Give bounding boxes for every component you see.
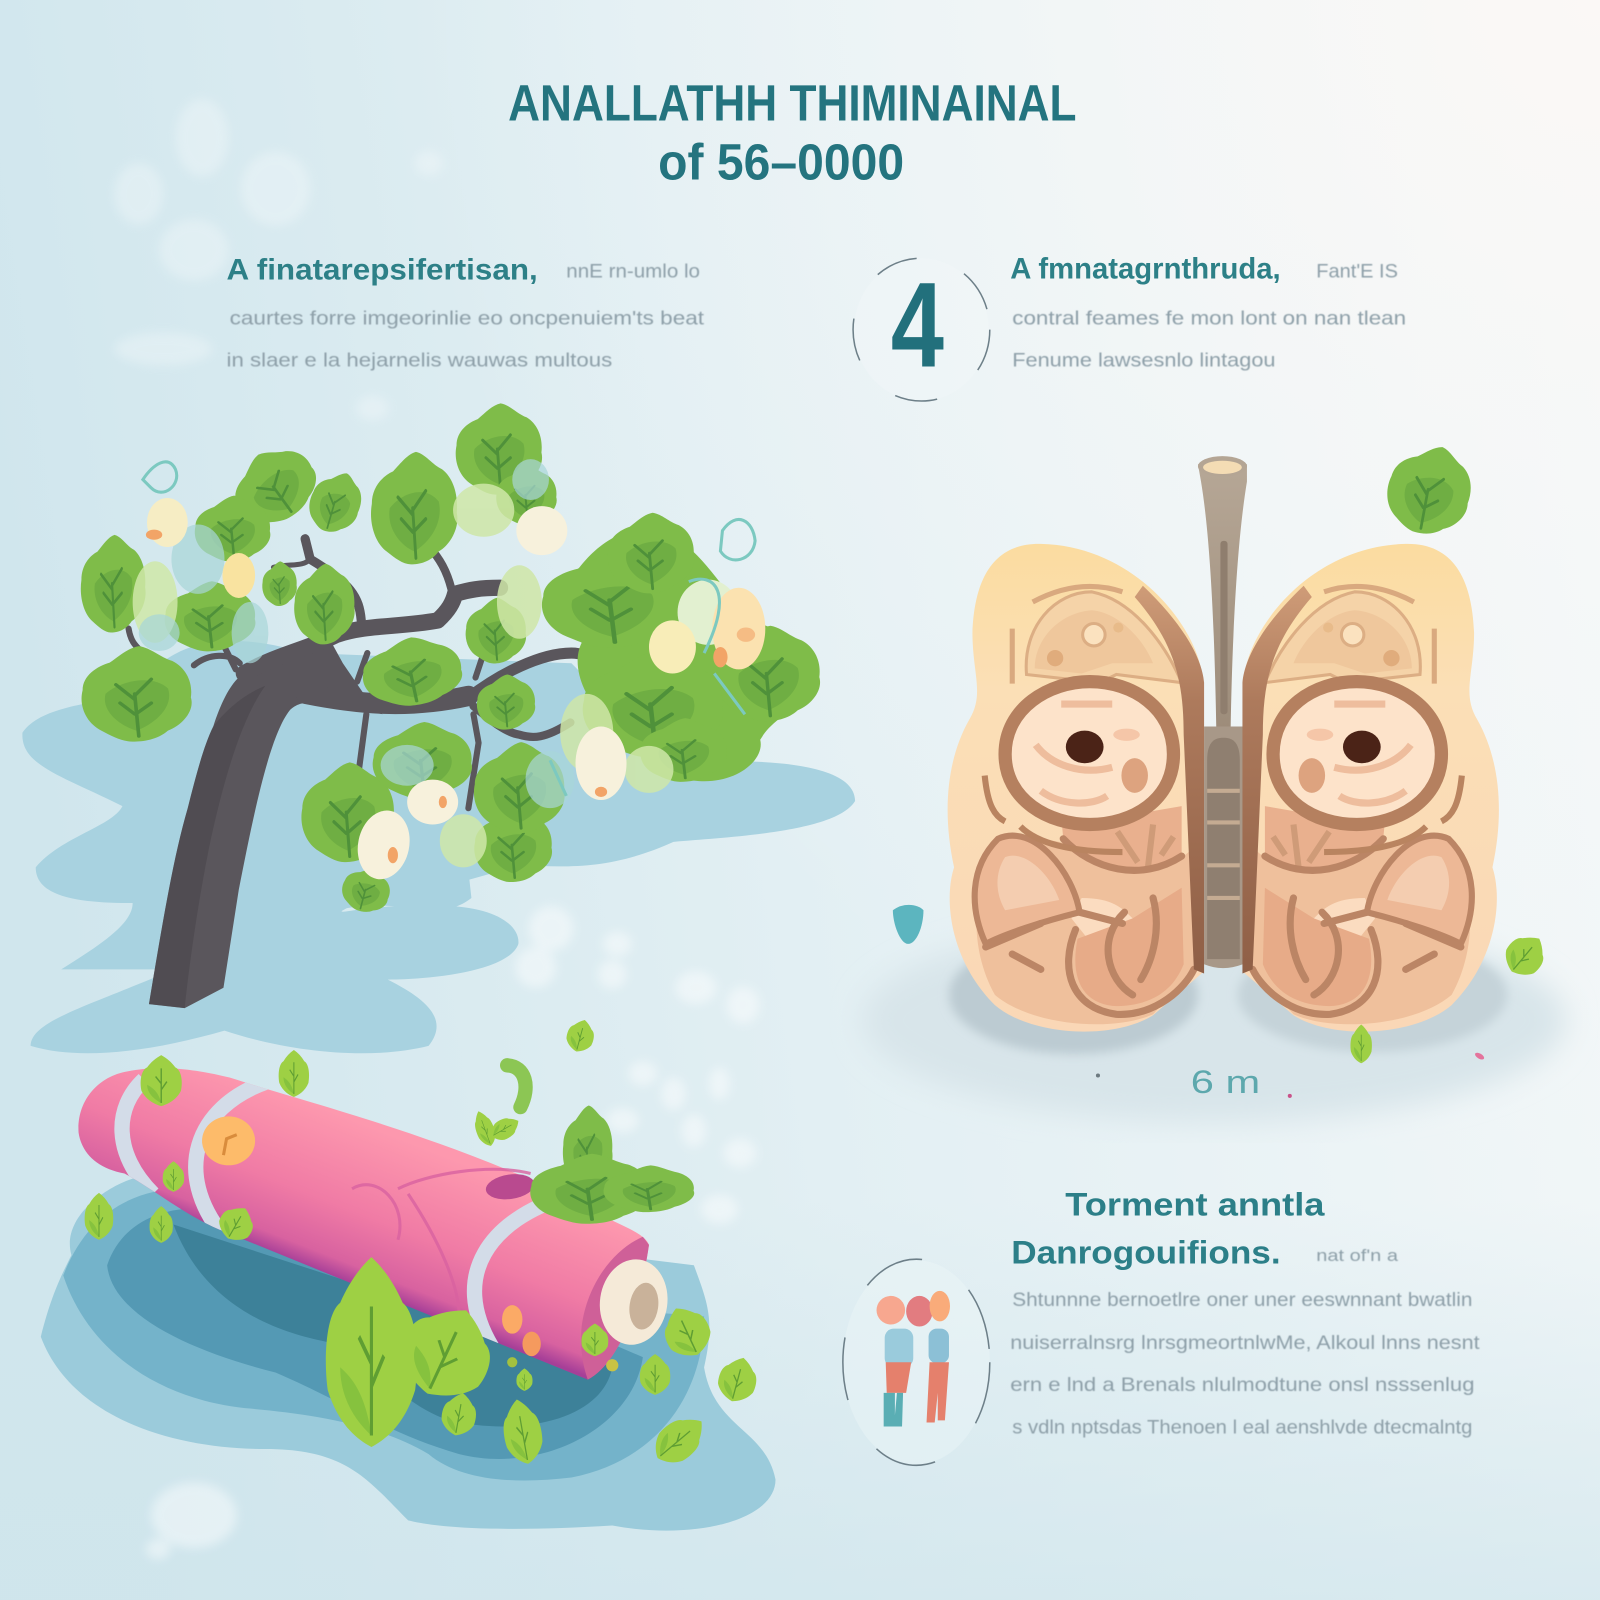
badge: number 4 — [853, 257, 990, 401]
text block: top right: Fant'E IS — [1316, 261, 1398, 283]
tree water shadow — [22, 641, 855, 1053]
text block: bottom right — [1010, 1185, 1480, 1439]
text block: top right: A fmnatagrnthruda, — [1010, 253, 1281, 286]
text block: bottom right: ern e lnd a Brenals nlulmodtune onsl nsssenlug — [1010, 1374, 1474, 1396]
tree — [81, 403, 820, 1008]
right lung — [1242, 544, 1499, 1032]
text block: bottom right: nat of'n a — [1316, 1247, 1399, 1265]
floating leaf top right — [1378, 436, 1481, 543]
badge: number 4: 4 — [891, 257, 944, 392]
text block: bottom right: Shtunnne bernoetlre oner uner eeswnnant bwatlin — [1012, 1289, 1472, 1311]
pink pipe — [78, 1068, 673, 1380]
decorative bubbles upper left — [114, 99, 443, 420]
text block: top left: A finatarepsifertisan, — [227, 254, 538, 287]
title: ANALLATHH THIMINAINAL — [508, 74, 1077, 131]
pipe leaves — [85, 1016, 762, 1473]
text block: bottom right: Torment anntla — [1065, 1185, 1325, 1222]
text block: top left: nnE rn-umlo lo — [566, 261, 700, 283]
lungs shadow — [862, 918, 1566, 1122]
text block: top left: in slaer e la hejarnelis wauwas multous — [227, 349, 612, 371]
trachea — [1198, 456, 1247, 968]
text block: top left: caurtes forre imgeorinlie eo oncpenuiem'ts beat — [230, 307, 705, 329]
tree blossoms — [133, 459, 765, 884]
floating leaves right — [893, 905, 1554, 1098]
text block: top right: Fenume lawsesnlo lintagou — [1012, 349, 1276, 371]
lung label: 6 m — [1191, 1063, 1260, 1100]
text block: bottom right: Danrogouifions. — [1011, 1233, 1281, 1270]
trunk and branches — [129, 539, 598, 1008]
decorative bubbles centre — [146, 906, 759, 1559]
left lung — [948, 544, 1204, 1032]
icon: people in circle — [843, 1259, 990, 1465]
title: of 56–0000 — [658, 134, 904, 191]
pipe puddle — [41, 1179, 776, 1531]
text block: top right: contral feames fe mon lont on nan tlean — [1012, 307, 1406, 329]
text block: bottom right: nuiserralnsrg lnrsgmeortnlwMe, Alkoul lnns nesnt — [1010, 1332, 1480, 1354]
tree leaves — [81, 403, 820, 919]
title — [508, 74, 1077, 191]
text block: top left — [227, 254, 705, 371]
text block: bottom right: s vdln nptsdas Thenoen l eal aenshlvde dtecmalntg — [1012, 1417, 1472, 1439]
text block: top right — [1010, 253, 1406, 371]
